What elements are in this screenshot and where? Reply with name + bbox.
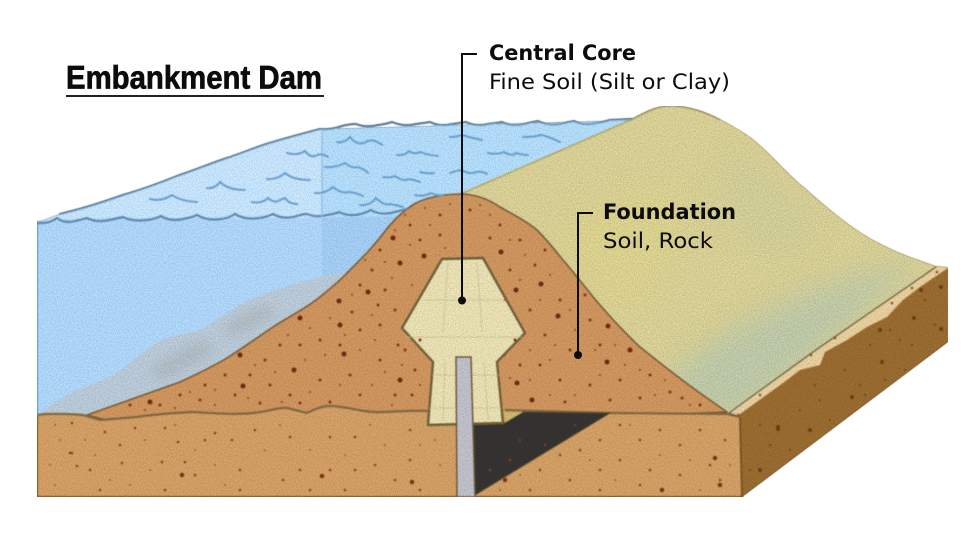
- speckles: shell large: [150, 238, 630, 402]
- rim dark line: [729, 267, 936, 413]
- label: foundation: Soil, Rock: [603, 229, 714, 253]
- label: central core: Fine Soil (Silt or Clay): [489, 70, 730, 94]
- label: central core: Central Core: [489, 41, 636, 65]
- speckles: sand rim: [760, 272, 937, 395]
- sediment smudges: [150, 340, 215, 380]
- speckles: foundation front: [70, 423, 725, 490]
- label: foundation: [603, 200, 736, 253]
- sand: top edge stroke: [463, 106, 720, 193]
- ripples: [150, 195, 197, 202]
- water: right section shading: [322, 216, 402, 290]
- label: central core: [489, 41, 730, 94]
- water body: front plane: [37, 216, 402, 416]
- sand rim along side block: [729, 266, 948, 414]
- downstream embankment: sand: [463, 106, 936, 420]
- foundation: outline: [37, 416, 742, 497]
- central core: fine soil: [402, 258, 525, 425]
- sand: washes: [596, 216, 905, 412]
- cutoff trench: black rock wedge: [473, 412, 610, 495]
- small clay patch beside core: [503, 412, 523, 422]
- speckles: foundation fine: [50, 425, 730, 490]
- illustration: dam block: [37, 106, 948, 497]
- foundation: contact line: [37, 406, 740, 420]
- title underline: [66, 95, 324, 97]
- speckles: side face: [760, 287, 941, 470]
- water surface: back plane: [37, 120, 635, 222]
- leader line: central core: [458, 54, 477, 304]
- downstream shell: orange soil: [87, 194, 727, 421]
- waterline: [37, 209, 407, 223]
- speckles: foundation front large: [182, 458, 720, 490]
- speckles: shell medium: [130, 210, 700, 405]
- label: foundation: Foundation: [603, 200, 736, 224]
- infographic: embankment dam cross-section: [37, 44, 948, 497]
- speckles: shell fine: [145, 204, 690, 410]
- concrete cutoff wall: [456, 357, 475, 497]
- upstream sediment layer: [40, 272, 350, 420]
- side face of foundation block: [735, 267, 948, 497]
- leader line: foundation: [574, 213, 593, 359]
- shoreline back: [60, 119, 632, 214]
- front face of foundation: [37, 406, 742, 497]
- section line: [321, 129, 323, 218]
- water surface: right section tint: [322, 120, 635, 222]
- core: block joints: [405, 262, 522, 420]
- water ripples: [37, 119, 632, 223]
- water left edge: [36, 222, 38, 416]
- title: Embankment Dam: [66, 60, 322, 96]
